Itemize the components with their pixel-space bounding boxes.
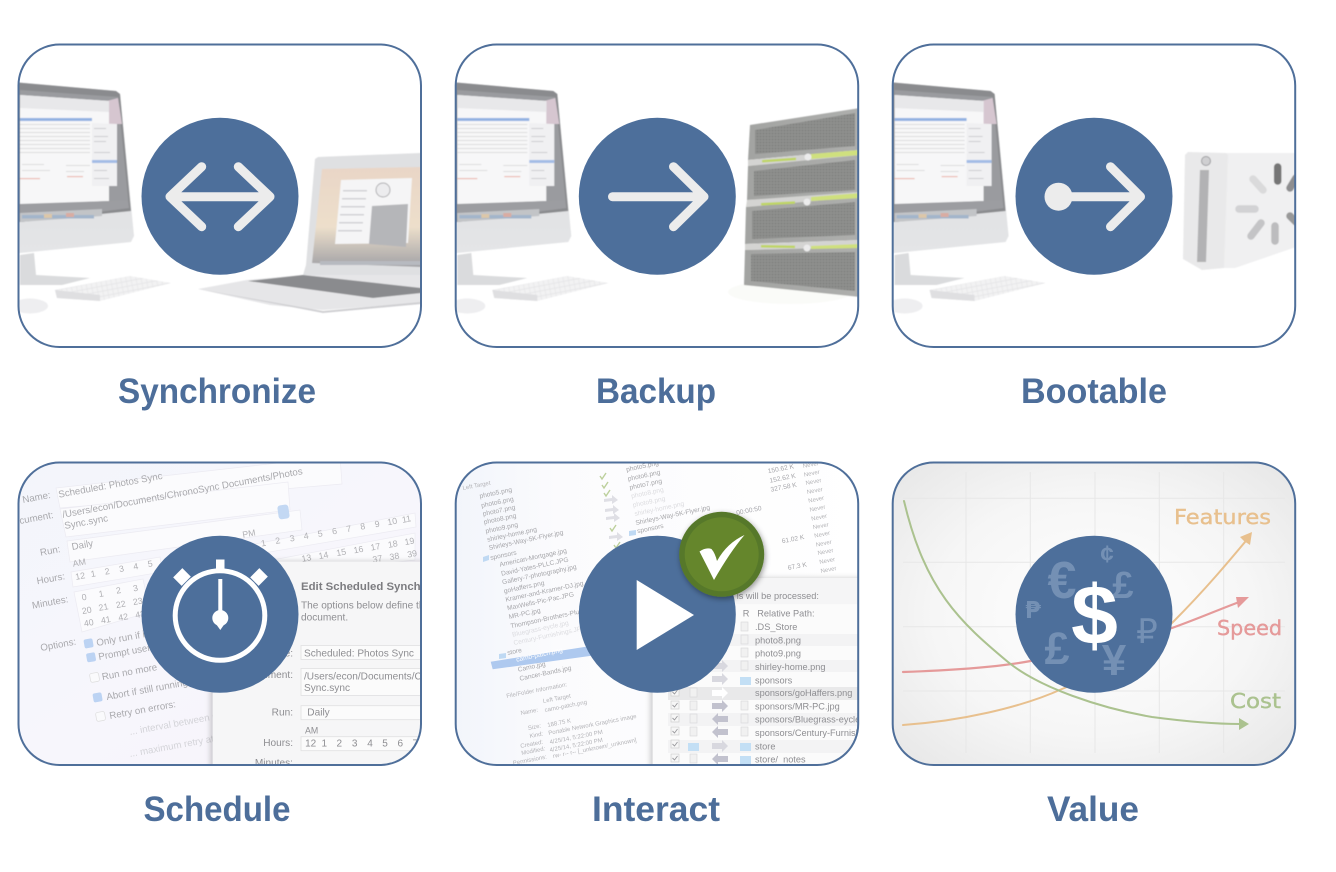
- window: back file list: 00:00:50: [736, 505, 763, 517]
- window: front processing list: sponsors/MR-PC.jpg: [755, 701, 840, 711]
- chart: cost curve: [904, 501, 1249, 730]
- dialog: back scheduler window: 6: [331, 526, 338, 536]
- window: back file list: goHaffers.png: [503, 580, 545, 595]
- dialog: front scheduler window: Sync.sync: [304, 683, 350, 694]
- window: back file list: rw- r-- r-- [_unknown/_unknown]: [553, 738, 637, 760]
- window: back file list: Century-Furnishings.JPG: [513, 625, 587, 647]
- dialog: back scheduler window: 13: [301, 552, 312, 564]
- window: front processing list: store/_notes: [755, 754, 806, 764]
- window: back file list: 4/25/14, 5:22:00 PM: [549, 738, 603, 754]
- dialog: back scheduler window: 18: [387, 538, 399, 550]
- dialog: front scheduler window: 4: [367, 739, 373, 750]
- window: back file list: 152.62 K: [769, 473, 797, 485]
- dialog: front scheduler window: Daily: [307, 708, 331, 719]
- dialog: back scheduler window: Daily: [71, 538, 94, 553]
- window: back file list: 4/25/14, 5:22:00 PM: [549, 730, 603, 746]
- window: back file list: photo7.png: [482, 504, 516, 518]
- dialog: back scheduler window: 17: [370, 541, 381, 553]
- dialog: back scheduler window: 12: [74, 570, 86, 582]
- icon: currency coin: ₽: [1136, 612, 1158, 652]
- window: back file list: Shirleys-Way-5K-Flyer.jpg: [488, 529, 564, 552]
- dialog: back scheduler window: 38: [389, 551, 400, 562]
- window: back file list: Never: [819, 557, 836, 566]
- window: front processing list: store: [755, 741, 775, 751]
- dialog: back scheduler window: 1: [90, 568, 97, 579]
- card border: [18, 462, 421, 765]
- dialog: back scheduler window: 8: [359, 521, 366, 532]
- icon: currency coin: £: [1044, 623, 1070, 674]
- window: back file list: photo6.png: [627, 469, 661, 483]
- window: back file list: 61.02 K: [781, 534, 806, 545]
- window: back file list: Never: [804, 470, 820, 479]
- window: back file list: Portable Network Graphics image: [548, 714, 638, 737]
- panel: value: [892, 462, 1296, 766]
- dialog: back scheduler window: ... maximum retry attempts: [129, 729, 243, 760]
- dialog: back scheduler window: 15: [335, 547, 347, 558]
- dialog: back scheduler window: 22: [115, 599, 127, 610]
- card image: file list windows: [455, 460, 873, 778]
- icon: currency coin: ¥: [1102, 636, 1127, 685]
- dialog: back scheduler window: Run no more: [101, 662, 158, 683]
- window: back file list: photo8.png: [483, 512, 517, 526]
- illustration: external drive: [1183, 152, 1296, 270]
- dialog: back scheduler window: 3: [118, 563, 125, 574]
- icon: currency coin: [1016, 536, 1172, 693]
- window: back file list: camo-patch.png: [516, 647, 564, 664]
- dialog: back scheduler window: 1: [98, 588, 105, 599]
- window: back file list: Never: [805, 478, 822, 487]
- dialog: back scheduler window: 23: [132, 596, 144, 607]
- dialog: back scheduler window: Minutes:: [31, 594, 69, 612]
- dialog: back scheduler window: 43: [134, 609, 146, 620]
- heading: Backup: Backup: [596, 372, 716, 411]
- window: back file list: 67.3 K: [787, 561, 808, 572]
- window: back file list: photo9.png: [632, 495, 666, 509]
- card image: desktop and external drive: [894, 82, 1294, 314]
- window: back file list: Permissions:: [513, 754, 548, 767]
- window: back file list: photo5.png: [626, 460, 660, 474]
- dialog: back scheduler window: 14: [318, 549, 329, 561]
- chart: features curve: [903, 532, 1252, 725]
- heading: Value: Value: [1047, 790, 1139, 829]
- dialog: back scheduler window: 11: [401, 513, 412, 525]
- dialog: front scheduler window: Run:: [272, 708, 293, 719]
- illustration: server stack: [743, 108, 858, 298]
- window: back file list: shirley-home.png: [487, 526, 538, 544]
- window: back file list: Cancer-Bands.jpg: [519, 665, 572, 683]
- dialog: front scheduler window: 3: [352, 739, 358, 750]
- window: back file list: Never: [820, 566, 837, 575]
- dialog: front scheduler window: 1: [322, 739, 328, 750]
- dialog: back scheduler window: Run:: [39, 544, 61, 559]
- window: back file list: photo7.png: [629, 478, 663, 492]
- dialog: back scheduler window: 1: [260, 538, 267, 548]
- window: back file list: Never: [814, 531, 831, 540]
- card border: [893, 44, 1295, 347]
- window: back file list: Gallery-7-photography.jpg: [502, 564, 578, 586]
- dialog: back scheduler window: 2: [274, 535, 281, 546]
- dialog: back scheduler window: 7: [345, 523, 352, 534]
- window: back file list: store: [507, 647, 523, 657]
- window: back file list: Never: [811, 514, 828, 523]
- icon: currency coin: £: [1112, 565, 1134, 607]
- window: back file list: Thompson-Brothers-Plumbing.jpg: [510, 603, 608, 630]
- dialog: back scheduler window: 10: [386, 516, 398, 527]
- window: back file list: shirley-home.png: [634, 501, 685, 518]
- icon: green check badge: [679, 512, 764, 597]
- heading: Interact: Interact: [592, 790, 720, 829]
- panel: bootable: [865, 44, 1296, 348]
- dialog: front scheduler window: AM: [305, 725, 318, 735]
- dialog: back scheduler window: 3: [132, 583, 139, 593]
- window: back file list: MaxWells-Pic-Pac.JPG: [507, 591, 575, 612]
- card image: scheduler dialogs: [20, 464, 420, 764]
- panel: backup: [427, 44, 860, 348]
- dialog: back scheduler window: Retry on errors:: [109, 699, 177, 722]
- window: back file list: Camo.jpg: [517, 661, 547, 674]
- dialog: back scheduler window: 2: [115, 585, 122, 596]
- card image: desktop and laptop: [20, 82, 420, 314]
- dialog: front scheduler window: [208, 558, 420, 764]
- card image: desktop and server: [456, 82, 858, 314]
- window: back file list: photo5.png: [479, 486, 513, 500]
- window: front processing list: Relative Path:: [757, 609, 815, 619]
- card border: [456, 462, 858, 765]
- window: back file list: camo-patch.png: [544, 700, 588, 714]
- dialog: front scheduler window: 12: [305, 739, 317, 750]
- dialog: back scheduler window: Name:: [22, 490, 52, 506]
- window: back file list: photo9.png: [485, 521, 519, 535]
- dialog: front scheduler window: document.: [301, 613, 348, 624]
- dialog: back scheduler window: Scheduled: Photos Sync: [58, 471, 164, 501]
- card image: cost chart: [892, 462, 1296, 766]
- dialog: back scheduler window: 0: [81, 592, 88, 602]
- dialog: front scheduler window: Edit Scheduled Synchronization: [301, 581, 475, 593]
- window: back file list: Left Target: [543, 694, 572, 705]
- window: back file list: Never: [809, 505, 826, 514]
- dialog: front scheduler window: 2: [337, 739, 343, 750]
- window: front processing list: photo9.png: [755, 649, 801, 659]
- dialog: back scheduler window: Hours:: [36, 571, 66, 587]
- icon: currency coin: €: [1048, 552, 1076, 610]
- dialog: front scheduler window: Scheduled: Photos Sync: [304, 649, 414, 660]
- panel: interact: [455, 460, 873, 778]
- dialog: front scheduler window: Name:: [263, 649, 293, 660]
- dialog: back scheduler window: Sync.sync: [64, 513, 109, 532]
- window: front processing list: R: [743, 609, 750, 619]
- dialog: back scheduler window: 9: [374, 519, 381, 529]
- window: front processing list: is will be processed:: [737, 591, 819, 601]
- window: back file list: American-Mortgage.jpg: [499, 547, 568, 569]
- illustration: iMac: [456, 82, 607, 314]
- dialog: back scheduler window: Only run if idle: [96, 627, 158, 649]
- window: front processing list: [648, 576, 858, 764]
- dialog: back scheduler window: 4: [303, 530, 310, 541]
- icon: stopwatch: [142, 536, 298, 693]
- icon: currency coin: ¢: [1100, 541, 1114, 568]
- dialog: back scheduler window: 42: [117, 611, 129, 623]
- dialog: front scheduler window: Minutes:: [255, 758, 293, 769]
- window: front processing list: .DS_Store: [755, 622, 797, 632]
- window: back file list: File/Folder Information:: [506, 682, 568, 700]
- card border: [456, 44, 858, 347]
- dialog: back scheduler window: /Users/econ/Documents/ChronoSync Documents/Photos: [62, 466, 304, 521]
- chart: speed curve: [903, 597, 1249, 672]
- icon: two-way arrow: [142, 118, 298, 275]
- dialog: front scheduler window: Document:: [244, 670, 293, 681]
- panel: synchronize: [0, 44, 422, 348]
- card border: [18, 44, 421, 347]
- dialog: back scheduler window: 5: [147, 558, 154, 569]
- dialog: back scheduler window: 20: [81, 605, 93, 616]
- icon: currency coin: $: [1071, 568, 1118, 662]
- window: back file list: sponsors: [637, 523, 665, 535]
- window: front processing list: photo8.png: [755, 635, 801, 645]
- window: back file list: sponsors: [490, 549, 518, 562]
- dialog: back scheduler window: Prompt user: [98, 643, 152, 663]
- window: back file list: 188.75 K: [547, 718, 572, 729]
- label: Speed: Speed: [1217, 616, 1282, 640]
- window: front processing list: sponsors/Bluegrass-eycle: [755, 715, 860, 725]
- window: front processing list: shirley-home.png: [755, 662, 825, 672]
- illustration: laptop: [198, 153, 422, 313]
- window: back file list: David-Yates-PLLC.JPG: [501, 557, 569, 578]
- icon: one-way arrow: [579, 118, 736, 275]
- label: Cost: Cost: [1230, 689, 1281, 713]
- window: back file list: Never: [816, 540, 832, 549]
- dialog: back scheduler window: ... interval between retries: [129, 707, 240, 738]
- window: back file list: 327.58 K: [770, 482, 798, 494]
- window: back file list: Never: [813, 522, 829, 531]
- dialog: back scheduler window: 39: [406, 548, 418, 560]
- heading: Bootable: Bootable: [1021, 372, 1167, 411]
- chart: grid: [903, 472, 1285, 753]
- window: back file list: 150.62 K: [767, 463, 795, 475]
- dialog: front scheduler window: 7: [413, 739, 419, 750]
- window: back file list: Modified:: [521, 746, 546, 757]
- dialog: back scheduler window: 41: [100, 614, 112, 626]
- illustration: iMac: [20, 82, 170, 314]
- window: back file list: photo8.png: [631, 486, 665, 500]
- dialog: back scheduler window: 40: [83, 617, 95, 629]
- dialog: front scheduler window: Hours:: [263, 738, 293, 749]
- dialog: front scheduler window: The options below define the: [301, 600, 430, 611]
- heading: Schedule: Schedule: [144, 790, 290, 829]
- window: back file list: Never: [817, 548, 834, 557]
- dialog: back scheduler window: cument:: [19, 510, 54, 527]
- window: back file list: Bluegrass-eycle.jpg: [512, 620, 570, 639]
- dialog: back scheduler window: 2: [104, 566, 111, 577]
- window: back file list: Shirleys-Way-5K-Flyer.jpg: [635, 504, 711, 527]
- icon: dot with arrow: [1016, 118, 1172, 275]
- dialog: back scheduler window: 21: [98, 601, 109, 613]
- dialog: back scheduler window: 16: [353, 544, 364, 555]
- window: back file list: photo6.png: [481, 496, 515, 510]
- window: front processing list: sponsors/Century-Furnish: [755, 728, 861, 738]
- dialog: front scheduler window: 6: [398, 739, 404, 750]
- window: back file list: MR-PC.jpg: [508, 607, 542, 621]
- window: front processing list: sponsors: [755, 675, 793, 685]
- icon: currency coin: ₱: [1025, 598, 1041, 624]
- dialog: back scheduler window: 4: [132, 561, 139, 572]
- dialog: back scheduler window: Options:: [40, 637, 77, 654]
- window: back file list: Size:: [528, 723, 542, 732]
- dialog: back scheduler window: AM: [72, 556, 87, 569]
- card border: [893, 462, 1295, 765]
- heading: Synchronize: Synchronize: [118, 372, 316, 411]
- dialog: back scheduler window: 19: [404, 536, 415, 547]
- window: back file list: Never: [807, 487, 823, 496]
- panel: schedule: [18, 462, 422, 766]
- window: back file list: Left Target: [462, 481, 491, 492]
- icon: play button: [579, 536, 736, 693]
- illustration: iMac: [894, 82, 1044, 314]
- dialog: back scheduler window: 37: [372, 553, 383, 565]
- dialog: back scheduler window: 3: [289, 533, 296, 544]
- window: front processing list: sponsors/goHaffers.png: [755, 688, 852, 698]
- window: back file list: Never: [803, 461, 819, 470]
- dialog: back scheduler window: Abort if still running: [106, 677, 189, 703]
- window: back file list: Kramer-and-Kramer-DJ.jpg: [505, 580, 585, 604]
- window: back file list: Kind:: [529, 731, 544, 740]
- window: back file list: [462, 460, 837, 767]
- dialog: back scheduler window: PM: [242, 527, 256, 540]
- dialog: back scheduler window: 5: [317, 528, 324, 539]
- dialog: back scheduler window: [19, 456, 418, 760]
- dialog: front scheduler window: 5: [382, 739, 388, 750]
- label: Features: Features: [1174, 505, 1271, 529]
- window: back file list: Created:: [520, 740, 544, 750]
- window: back file list: Name:: [520, 708, 539, 717]
- dialog: front scheduler window: /Users/econ/Documents/ChronoSync: [304, 671, 470, 682]
- window: back file list: Never: [808, 496, 825, 505]
